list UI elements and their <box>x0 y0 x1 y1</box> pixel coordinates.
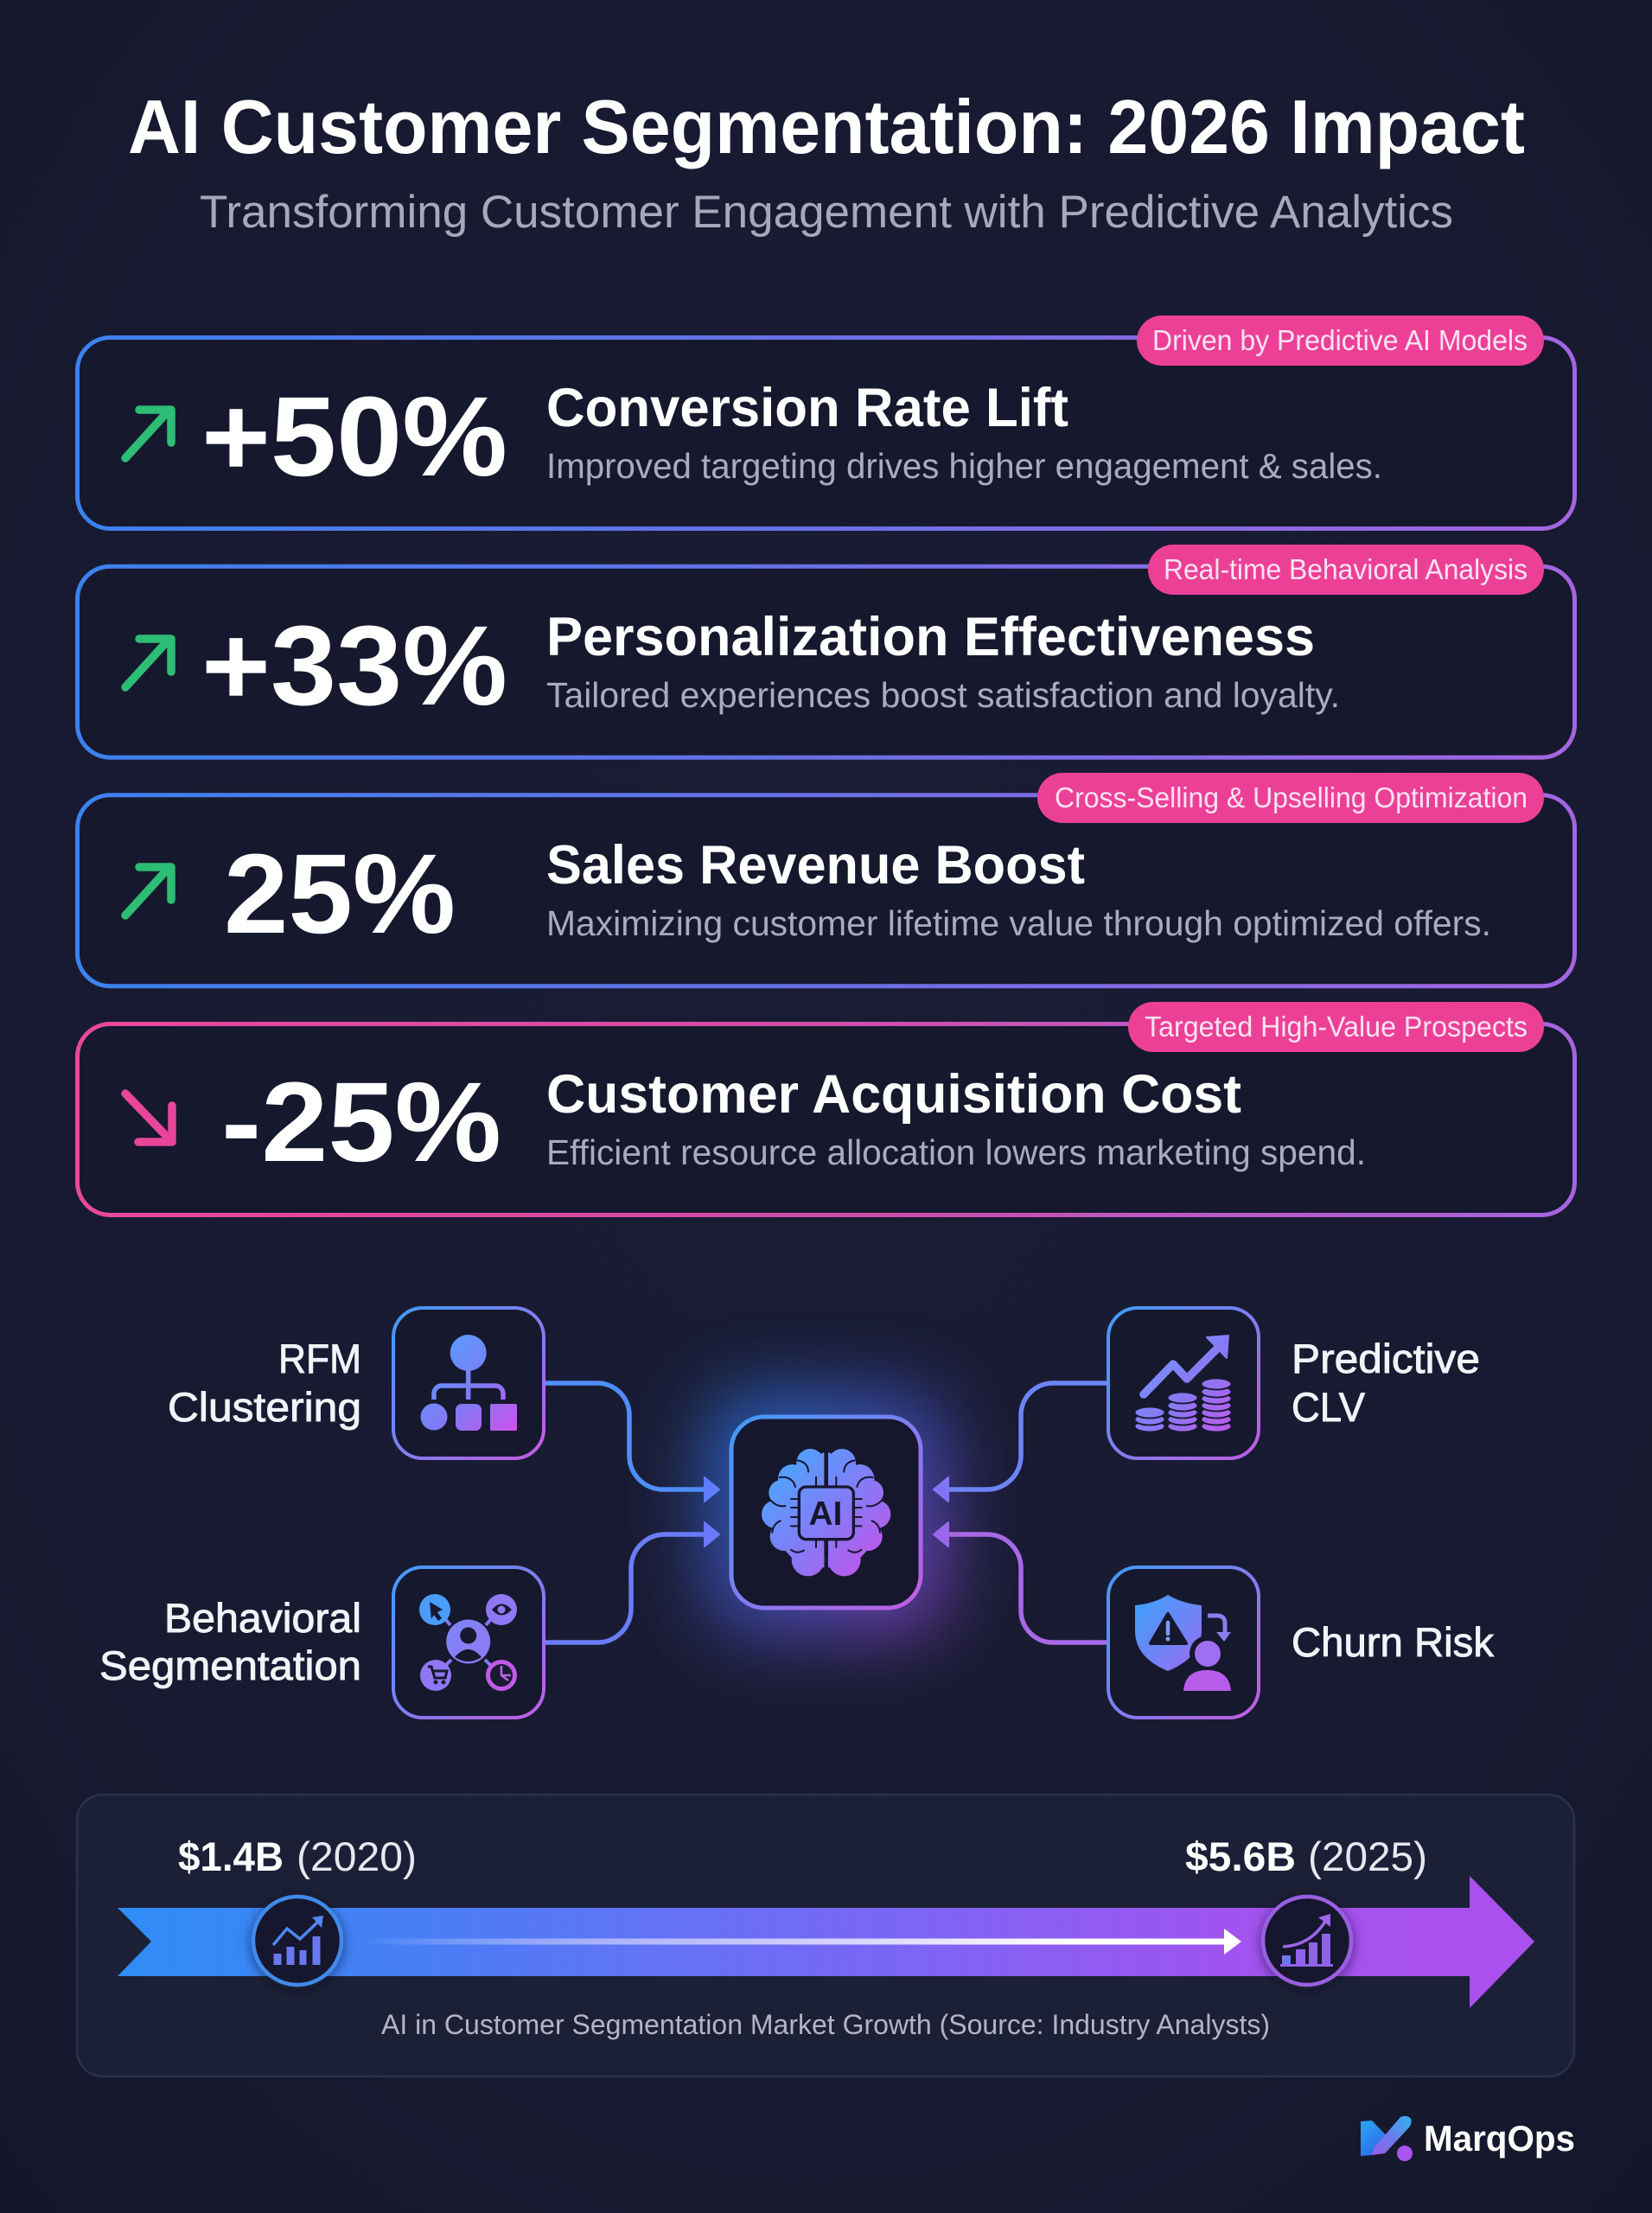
icon box: predictive CLV <box>1108 1308 1259 1458</box>
badge: Driven by Predictive AI Models <box>1152 324 1528 356</box>
panel: acquisition cost card <box>78 1002 1575 1215</box>
icon: shield and user <box>1135 1595 1231 1691</box>
description: Tailored experiences boost satisfaction and loyalty. <box>546 675 1340 715</box>
description: Improved targeting drives higher engagement & sales. <box>546 446 1382 486</box>
badge: Targeted High-Value Prospects <box>1145 1011 1528 1043</box>
label: Behavioral Segmentation: Segmentation <box>99 1642 361 1688</box>
arrow: predictive CLV to AI hub <box>934 1383 1107 1502</box>
stat: +50%: +50% <box>201 373 507 500</box>
panel: conversion rate card <box>78 316 1575 529</box>
icon: 2020 market marker <box>253 1897 341 1985</box>
growth arrow band <box>118 1876 1534 2008</box>
label: 2025 value: $5.6B <box>1185 1834 1296 1879</box>
heading: Personalization Effectiveness <box>546 607 1315 667</box>
AI hub box <box>731 1417 921 1608</box>
icon: green up arrow <box>125 867 171 915</box>
icon: pink down arrow <box>125 1094 172 1142</box>
label: Behavioral Segmentation: Behavioral <box>164 1595 361 1641</box>
icon: rising coins chart <box>1134 1336 1231 1432</box>
title: AI Customer Segmentation: 2026 Impact <box>128 84 1525 169</box>
subtitle: Transforming Customer Engagement with Predictive Analytics <box>200 187 1453 238</box>
description: Maximizing customer lifetime value through optimized offers. <box>546 903 1491 943</box>
panel: sales revenue card <box>78 773 1575 986</box>
AI label: AI <box>809 1495 842 1533</box>
icon: green up arrow <box>125 639 171 687</box>
arrow: behavioral to AI hub <box>545 1522 719 1642</box>
icon: 2025 market marker <box>1263 1897 1351 1985</box>
label: RFM Clustering: RFM <box>278 1336 361 1381</box>
icon: green up arrow <box>125 410 171 458</box>
stat: -25%: -25% <box>221 1058 501 1185</box>
label: 2025 year: (2025) <box>1308 1834 1427 1879</box>
inner white arrow <box>363 1929 1241 1955</box>
arrow: RFM to AI hub <box>545 1383 719 1502</box>
label: RFM Clustering <box>168 1336 361 1430</box>
logo wordmark: MarqOps <box>1424 2118 1575 2159</box>
icon: AI brain <box>762 1448 890 1577</box>
badge: Cross-Selling & Upselling Optimization <box>1055 781 1528 813</box>
label: Predictive CLV: CLV <box>1292 1384 1366 1430</box>
badge: Real-time Behavioral Analysis <box>1164 553 1528 585</box>
icon box: churn risk <box>1108 1567 1259 1718</box>
icon: behavior network <box>419 1594 517 1691</box>
heading: Conversion Rate Lift <box>546 378 1068 438</box>
icon box: behavioral segmentation <box>393 1567 544 1718</box>
badge <box>1128 1002 1544 1052</box>
logo: MarqOps <box>1361 2116 1575 2161</box>
label: Predictive CLV: Predictive <box>1292 1336 1480 1381</box>
label: Predictive CLV <box>1292 1336 1480 1430</box>
badge <box>1137 316 1544 366</box>
stat: +33%: +33% <box>201 602 507 729</box>
stat: 25%: 25% <box>224 830 456 957</box>
label: 2020 year: (2020) <box>297 1834 417 1879</box>
label: 2020 value: $1.4B <box>178 1834 284 1879</box>
icon: org chart <box>420 1335 517 1431</box>
label: RFM Clustering: Clustering <box>168 1384 361 1430</box>
label: Churn Risk: Churn Risk <box>1292 1619 1495 1665</box>
panel: market growth <box>77 1795 1574 2076</box>
badge <box>1148 545 1544 595</box>
arrow: churn risk to AI hub <box>934 1522 1107 1642</box>
panel: personalization card <box>78 545 1575 757</box>
glow behind AI hub <box>705 1392 947 1635</box>
heading: Customer Acquisition Cost <box>546 1064 1241 1125</box>
caption: AI in Customer Segmentation Market Growth (Source: Industry Analysts) <box>381 2009 1270 2040</box>
badge <box>1037 773 1544 823</box>
description: Efficient resource allocation lowers marketing spend. <box>546 1132 1366 1172</box>
icon: logo mark <box>1361 2116 1413 2161</box>
heading: Sales Revenue Boost <box>546 835 1085 896</box>
label: Behavioral Segmentation <box>99 1595 361 1688</box>
icon box: RFM clustering <box>393 1308 544 1458</box>
